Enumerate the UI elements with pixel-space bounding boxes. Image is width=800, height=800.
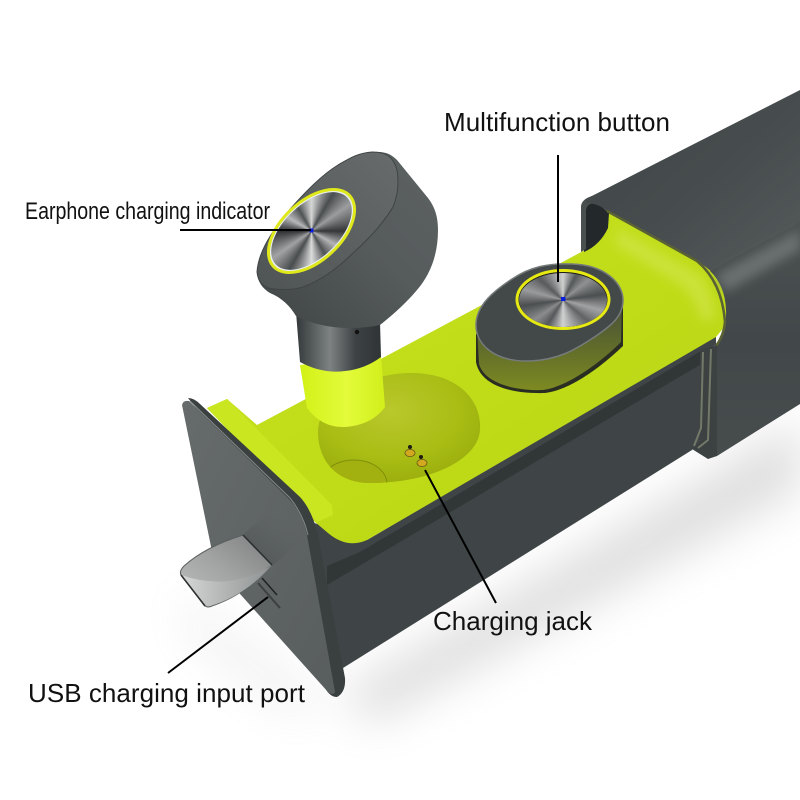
label: USB charging input port: USB charging input port xyxy=(28,678,306,708)
indicator ring xyxy=(253,174,370,288)
earbud side xyxy=(477,300,622,390)
tab flare into plate xyxy=(243,510,302,565)
earbud top xyxy=(476,264,623,361)
sleeve edge highlight xyxy=(716,230,800,292)
multifunction brushed metal disc xyxy=(518,272,608,327)
label: Charging jack: Charging jack xyxy=(433,606,593,636)
earbud face xyxy=(257,152,398,290)
plate rim highlight xyxy=(190,401,308,535)
well inner pad xyxy=(330,460,388,483)
tray light streak xyxy=(615,228,715,320)
blue indicator dot xyxy=(561,297,566,301)
plate front xyxy=(182,401,335,694)
infographic canvas xyxy=(26,90,800,727)
sleeve side face xyxy=(710,222,800,456)
dark neck xyxy=(296,312,381,372)
multifunction disc ring xyxy=(517,270,609,328)
case side groove xyxy=(327,348,706,585)
tray surface xyxy=(207,208,728,543)
translucent pull tab xyxy=(180,535,272,607)
sleeve of case xyxy=(581,90,800,459)
end plate of case xyxy=(180,398,345,697)
brushed metal disc xyxy=(257,178,366,284)
earbud body xyxy=(257,152,438,328)
tab fold line xyxy=(181,535,272,606)
USB port slots xyxy=(258,578,280,608)
plate edge xyxy=(188,398,345,697)
case inner tray xyxy=(207,208,728,543)
leader lines xyxy=(168,155,558,673)
sleeve left rim xyxy=(581,190,620,252)
soft ground shadow xyxy=(180,420,800,725)
sleeve top face xyxy=(586,90,800,272)
sleeve lower corner xyxy=(692,345,717,459)
sleeve front rim xyxy=(607,211,725,346)
inner slot detail xyxy=(694,349,711,448)
earbud recess xyxy=(476,300,623,393)
left earbud lifted from case xyxy=(253,152,438,427)
leader: charging jack xyxy=(425,470,496,603)
leader: multifunction button xyxy=(557,155,559,282)
case side wall xyxy=(305,335,716,668)
charging pins xyxy=(405,445,427,467)
leader: earphone charging indicator xyxy=(180,229,311,231)
sleeve opening xyxy=(583,198,609,252)
microphone hole xyxy=(355,330,359,334)
right earbud seated in case xyxy=(476,264,623,393)
earbud well xyxy=(318,373,480,483)
label: Multifunction button: Multifunction button xyxy=(444,107,670,137)
tab lower lens xyxy=(181,565,272,606)
label: Earphone charging indicator: Earphone charging indicator xyxy=(25,198,270,225)
leader: USB charging input port xyxy=(168,597,268,673)
lime stem xyxy=(300,356,385,427)
charging case body xyxy=(207,208,728,668)
blue indicator dot xyxy=(310,228,314,232)
tray raised end step xyxy=(207,399,333,522)
